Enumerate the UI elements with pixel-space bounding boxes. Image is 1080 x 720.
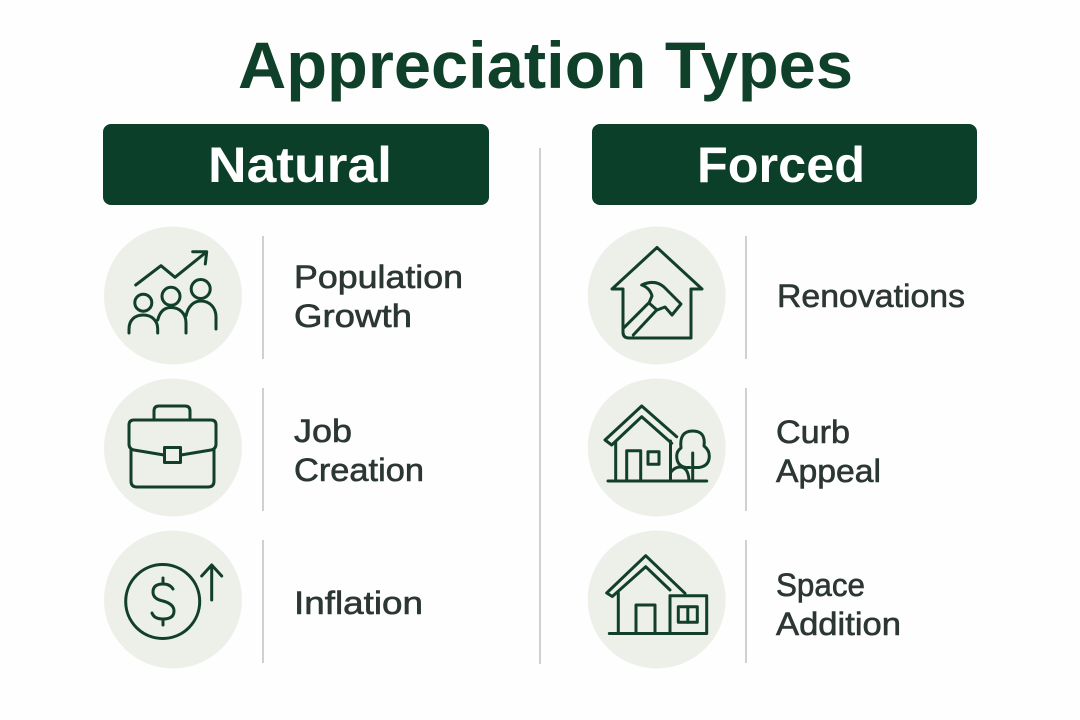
icon: inflation [104,530,242,668]
label: population growth: Growth [294,298,412,334]
icon: job creation [104,378,242,516]
label: inflation: Inflation [294,585,423,621]
label: curb appeal: Curb [776,414,850,450]
label: job creation: Creation [294,452,424,488]
title: Appreciation Types [238,28,853,102]
label: job creation: Job [294,413,352,449]
separator [262,236,264,359]
heading: forced [592,124,977,205]
label: renovations: Renovations [777,278,965,314]
label: space addition: Addition [776,606,901,642]
separator [745,236,747,359]
label: population growth: Population [294,259,463,295]
heading: natural [103,124,489,205]
icon: population growth [104,226,242,364]
icon: space addition [588,530,726,668]
separator [262,540,264,663]
label: space addition: Space [776,567,865,603]
center divider [539,148,541,664]
icon: renovations [588,226,726,364]
icon: curb appeal [588,378,726,516]
separator [262,388,264,511]
separator [745,388,747,511]
separator [745,540,747,663]
heading: natural: Natural [208,137,392,193]
heading: forced: Forced [697,137,865,193]
panel: natural [103,124,489,668]
label: curb appeal: Appeal [776,453,881,489]
panel: forced [588,124,977,668]
